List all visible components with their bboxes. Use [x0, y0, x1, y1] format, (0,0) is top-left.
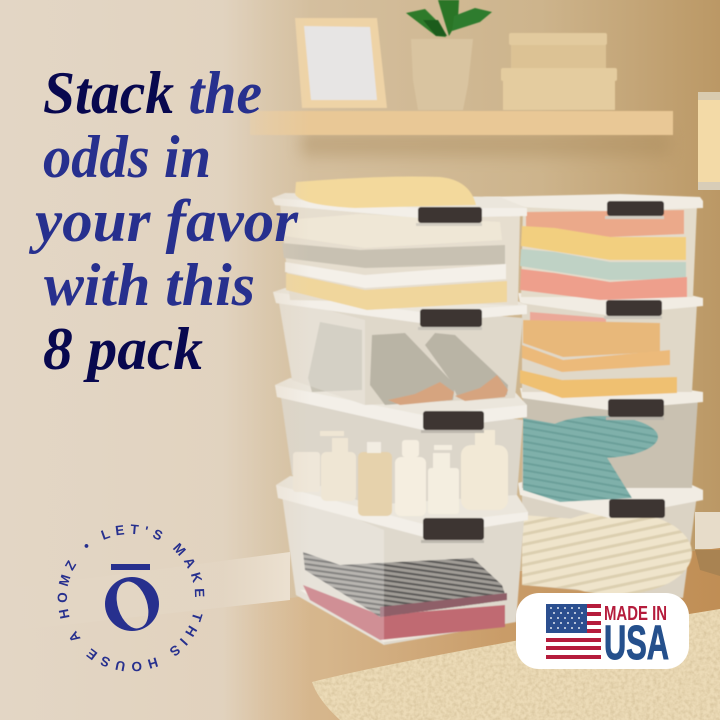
- rug: [312, 609, 720, 720]
- heading line 4: with this: [44, 252, 255, 318]
- shelf board: [250, 111, 673, 135]
- circular slogan: • LET'S MAKE THIS HOUSE A HOMZ: [58, 524, 204, 672]
- right baseboard: [695, 512, 720, 549]
- storage box 5: towels: [482, 194, 703, 300]
- storage box 8: cream yarn: [518, 480, 703, 598]
- made in USA badge: [516, 593, 689, 670]
- USA label: USA: [604, 617, 669, 670]
- heading line 1: Stack the: [43, 60, 262, 126]
- storage box 2: sneakers: [273, 288, 527, 405]
- heading line 2: odds in: [43, 124, 211, 190]
- picture frame: [295, 18, 387, 108]
- lamp base on floor: [695, 550, 720, 576]
- shelf with objects: [250, 0, 673, 135]
- left fade overlay: [0, 0, 310, 720]
- made in label: MADE IN: [604, 603, 667, 625]
- heading: [29, 60, 299, 382]
- right stack of storage boxes: [482, 194, 703, 598]
- stacked round boxes: [501, 33, 617, 110]
- shelf shadow: [300, 132, 670, 156]
- heading line 5: 8 pack: [43, 316, 203, 382]
- storage box 3: bottles: [275, 378, 527, 516]
- USA flag: [546, 604, 601, 659]
- potted plant: [406, 0, 492, 110]
- storage box 4: folded clothes: [276, 476, 528, 645]
- floor: [0, 548, 720, 720]
- storage box 6: books: [518, 293, 703, 398]
- left stack of storage boxes: [272, 177, 528, 645]
- heading line 3: your favor: [29, 188, 299, 254]
- logo bar: [111, 564, 150, 570]
- badge background: [516, 593, 689, 669]
- left baseboard: [0, 552, 290, 632]
- logo ring: [105, 577, 159, 631]
- storage box 7: teal yarn: [520, 388, 703, 502]
- round brand logo: [58, 524, 204, 672]
- table lamp: [698, 92, 720, 190]
- bottles group: [293, 430, 508, 516]
- storage box 1: towels: [272, 177, 527, 310]
